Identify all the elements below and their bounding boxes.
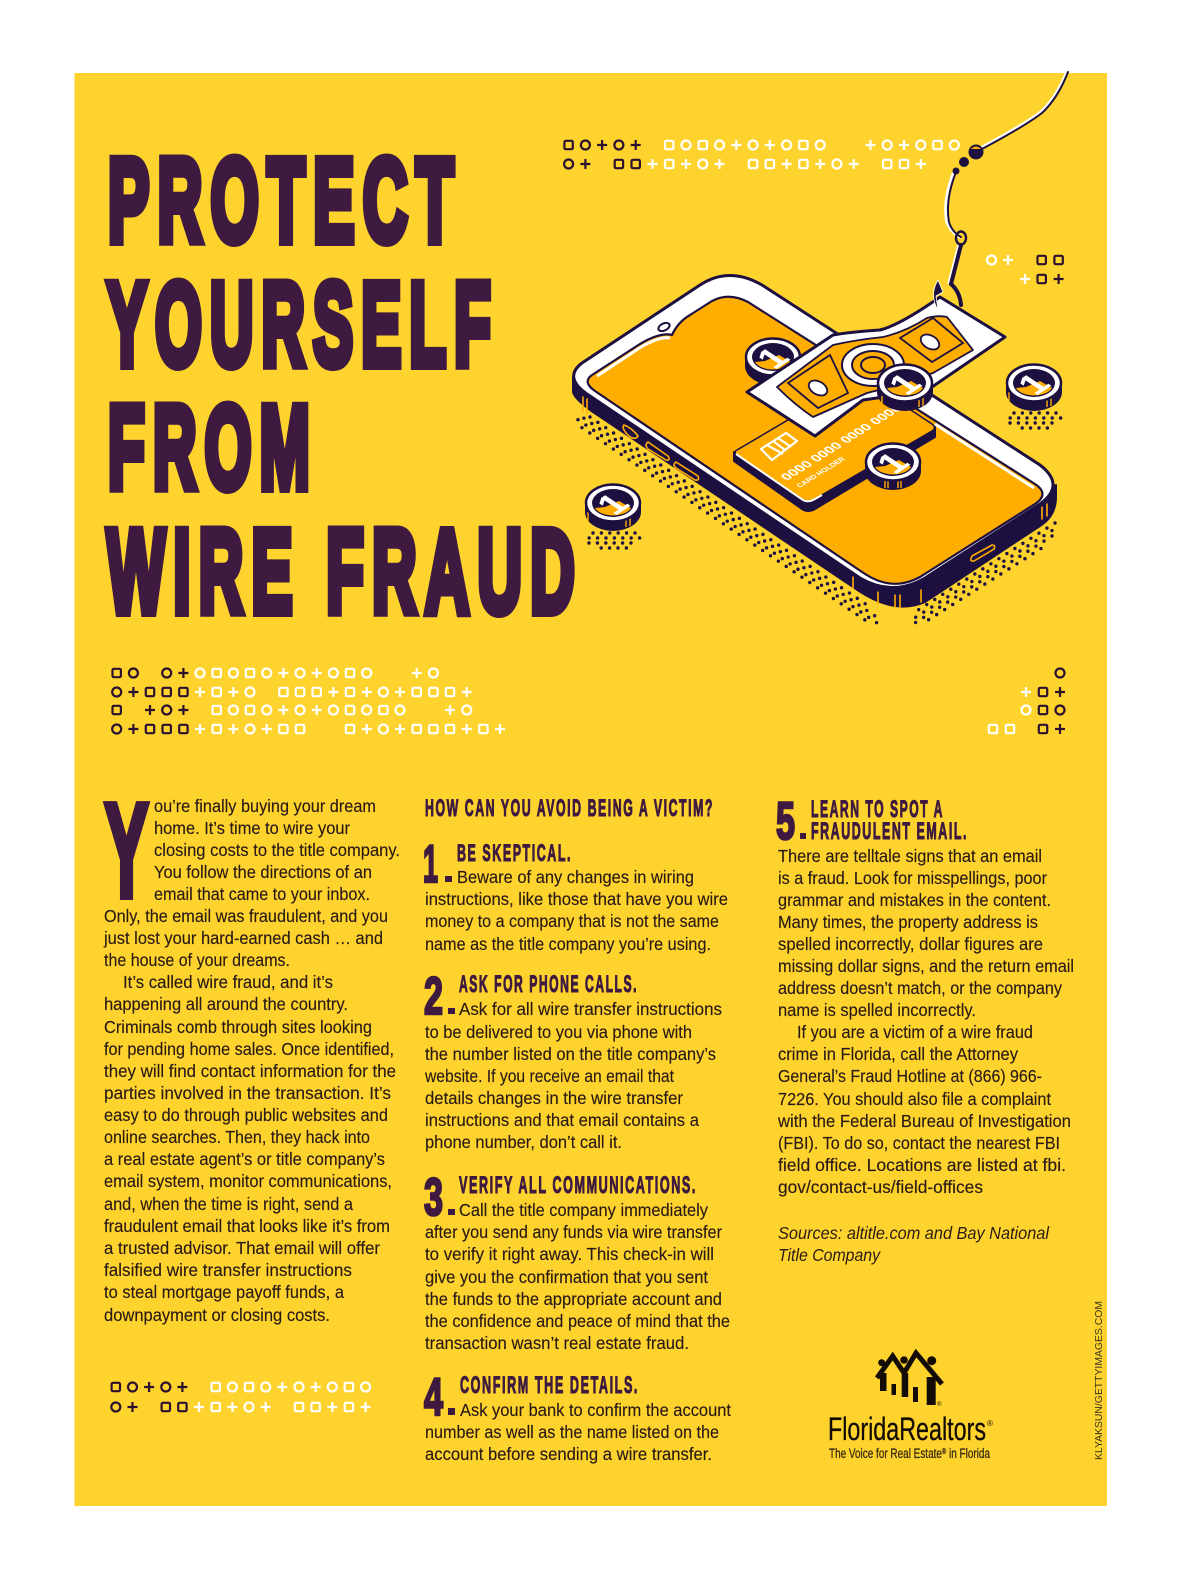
intro article column: You follow the directions of an — [154, 862, 372, 882]
tip 2: ASK FOR PHONE CALLS. — [459, 971, 638, 998]
decorative symbol rows: middle left — [112, 668, 505, 734]
title: WIRE FRAUD — [107, 506, 583, 638]
tip 1: money to a company that is not the same — [425, 911, 719, 931]
tip 5: General’s Fraud Hotline at (866) 966- — [778, 1066, 1042, 1086]
title: PROTECT — [108, 135, 462, 267]
tip 2: to be delivered to you via phone with — [425, 1022, 692, 1042]
tip 5: spelled incorrectly, dollar figures are — [778, 934, 1043, 954]
tip 4: number as well as the name listed on the — [425, 1422, 719, 1442]
intro article column: they will find contact information for the — [104, 1061, 396, 1081]
coin right of phone: 1 — [1009, 368, 1059, 401]
intro article column: home. It’s time to wire your — [154, 818, 350, 838]
intro article column: Y — [105, 777, 148, 924]
intro article column: easy to do through public websites and — [104, 1105, 388, 1125]
tip 3: the funds to the appropriate account and — [425, 1289, 722, 1309]
credit card — [734, 377, 935, 511]
tip 1: Beware of any changes in wiring — [457, 867, 694, 887]
intro article column: and, when the time is right, send a — [104, 1194, 353, 1214]
decorative symbol rows: bottom left — [111, 1382, 371, 1412]
tip 5: grammar and mistakes in the content. — [778, 890, 1051, 910]
phone side details — [583, 397, 1047, 607]
tip 2: details changes in the wire transfer — [425, 1088, 683, 1108]
phone body — [573, 377, 1056, 607]
tip 3: transaction wasn’t real estate fraud. — [425, 1333, 689, 1353]
tip 3: Call the title company immediately — [459, 1200, 708, 1220]
tip 5: If you are a victim of a wire fraud — [797, 1022, 1033, 1042]
intro article column: a trusted advisor. That email will offer — [104, 1238, 380, 1258]
intro article column: It’s called wire fraud, and it’s — [123, 972, 333, 992]
yellow background panel — [74, 73, 1107, 1506]
tip 3: the confidence and peace of mind that the — [425, 1311, 730, 1331]
Florida Realtors logo: ® — [937, 1401, 942, 1408]
tip 5: missing dollar signs, and the return email — [778, 956, 1074, 976]
intro article column: closing costs to the title company. — [154, 840, 400, 860]
tip 5: name is spelled incorrectly. — [778, 1000, 976, 1020]
tip 3: give you the confirmation that you sent — [425, 1267, 708, 1287]
tip 5: with the Federal Bureau of Investigation — [777, 1111, 1071, 1131]
tip 1: 1 — [423, 835, 438, 894]
tip 2: phone number, don’t call it. — [425, 1132, 622, 1152]
card number: 0000 0000 0000 0000 — [777, 403, 905, 483]
logo tagline: in Florida — [946, 1446, 990, 1461]
coin on bill — [877, 364, 933, 411]
tip 1: BE SKEPTICAL. — [457, 840, 572, 867]
tip 4: 4 — [424, 1368, 443, 1427]
decorative symbol rows: middle right — [989, 668, 1065, 734]
tip 2 — [424, 967, 722, 1152]
tip 3 — [424, 1168, 730, 1353]
decorative symbols: small right group — [987, 255, 1064, 284]
card chip — [761, 433, 797, 460]
coin left of phone: 1 — [588, 488, 638, 521]
decorative symbol rows: top — [564, 140, 959, 169]
logo icon: houses and people — [877, 1353, 942, 1405]
coin behind bill: 1 — [748, 342, 798, 375]
tip 4: Ask your bank to confirm the account — [460, 1400, 731, 1420]
tip 3: after you send any funds via wire transfer — [425, 1222, 722, 1242]
tip 5: is a fraud. Look for misspellings, poor — [778, 868, 1047, 888]
intro article column: Only, the email was fraudulent, and you — [104, 906, 388, 926]
tip 5: crime in Florida, call the Attorney — [778, 1044, 1018, 1064]
intro article column: fraudulent email that looks like it’s from — [104, 1216, 390, 1236]
tip 4: CONFIRM THE DETAILS. — [460, 1372, 639, 1399]
photo credit: KLYAKSUN/GETTYIMAGES.COM — [1094, 1301, 1105, 1460]
phone speaker — [657, 321, 671, 333]
coin left of phone — [585, 484, 641, 548]
title: YOURSELF — [107, 259, 499, 391]
intro article column: happening all around the country. — [104, 994, 348, 1014]
phone top face — [574, 276, 1053, 588]
tip 2: instructions and that email contains a — [425, 1110, 699, 1130]
intro article column: just lost your hard-earned cash … and — [103, 928, 383, 948]
logo tagline: The Voice for Real Estate — [829, 1446, 982, 1461]
logo tagline: ® — [942, 1447, 946, 1456]
sources note — [778, 1223, 1050, 1265]
logo wordmark: FloridaRealtors — [828, 1411, 986, 1447]
title — [107, 135, 583, 638]
intro article column: to steal mortgage payoff funds, a — [104, 1282, 344, 1302]
coin right of phone — [1006, 364, 1062, 428]
intro article column: online searches. Then, they hack into — [104, 1127, 370, 1147]
illustration: phone with card, cash, coins and fish hook — [573, 72, 1068, 626]
tip 1: name as the title company you’re using. — [425, 934, 711, 954]
intro article column: a real estate agent’s or title company’s — [104, 1149, 385, 1169]
halftone shadow dots under phone — [578, 416, 1056, 626]
tip 5: (FBI). To do so, contact the nearest FBI — [778, 1133, 1060, 1153]
tip 5: 7226. You should also file a complaint — [778, 1089, 1051, 1109]
tip 3: 3 — [424, 1168, 443, 1227]
tip 5: FRAUDULENT EMAIL. — [811, 818, 968, 845]
coin on card — [865, 444, 921, 490]
tip 3: VERIFY ALL COMMUNICATIONS. — [459, 1172, 697, 1199]
intro article column: ou’re finally buying your dream — [154, 796, 376, 816]
Florida Realtors logo: ® — [987, 1419, 993, 1428]
intro article column: for pending home sales. Once identified, — [104, 1039, 394, 1059]
intro article column: falsified wire transfer instructions — [104, 1260, 352, 1280]
sources note: Title Company — [778, 1245, 881, 1265]
tip 5: Many times, the property address is — [778, 912, 1038, 932]
coin behind bill — [745, 338, 801, 385]
tip 4: account before sending a wire transfer. — [425, 1444, 712, 1464]
tip 1: instructions, like those that have you wire — [425, 889, 728, 909]
tip 3: to verify it right away. This check-in will — [425, 1244, 714, 1264]
intro article column: the house of your dreams. — [104, 950, 290, 970]
tip 5: gov/contact-us/field-offices — [778, 1177, 983, 1197]
tip 5: address doesn’t match, or the company — [778, 978, 1062, 998]
coin on bill: 1 — [880, 368, 930, 401]
fish hook and line — [934, 72, 1068, 310]
column heading: HOW CAN YOU AVOID BEING A VICTIM? — [425, 795, 714, 822]
Florida Realtors logo — [828, 1353, 993, 1461]
intro article column: Criminals comb through sites looking — [104, 1017, 372, 1037]
tip 2: website. If you receive an email that — [424, 1066, 674, 1086]
intro article column: email that came to your inbox. — [154, 884, 370, 904]
intro article column: downpayment or closing costs. — [104, 1305, 330, 1325]
intro article column — [103, 777, 400, 1325]
tip 2: Ask for all wire transfer instructions — [459, 999, 722, 1019]
screen highlight — [597, 338, 1034, 488]
tip 5: LEARN TO SPOT A — [811, 796, 944, 823]
tip 4 — [424, 1368, 731, 1464]
title: FROM — [108, 382, 318, 514]
tip 2: 2 — [424, 967, 443, 1026]
tip 2: the number listed on the title company’s — [425, 1044, 716, 1064]
card holder label: CARD HOLDER — [794, 455, 848, 489]
tip 5 — [776, 792, 1074, 1197]
coin on card: 1 — [868, 447, 918, 480]
intro article column: parties involved in the transaction. It’s — [104, 1083, 391, 1103]
tip 5: 5 — [776, 792, 795, 851]
tip 5: There are telltale signs that an email — [778, 846, 1042, 866]
tip 1 — [423, 835, 728, 954]
dollar bill — [747, 297, 1005, 436]
tip 5: field office. Locations are listed at fbi. — [778, 1155, 1066, 1175]
intro article column: email system, monitor communications, — [104, 1171, 392, 1191]
phone screen — [588, 297, 1042, 584]
sources note: Sources: altitle.com and Bay National — [778, 1223, 1050, 1243]
